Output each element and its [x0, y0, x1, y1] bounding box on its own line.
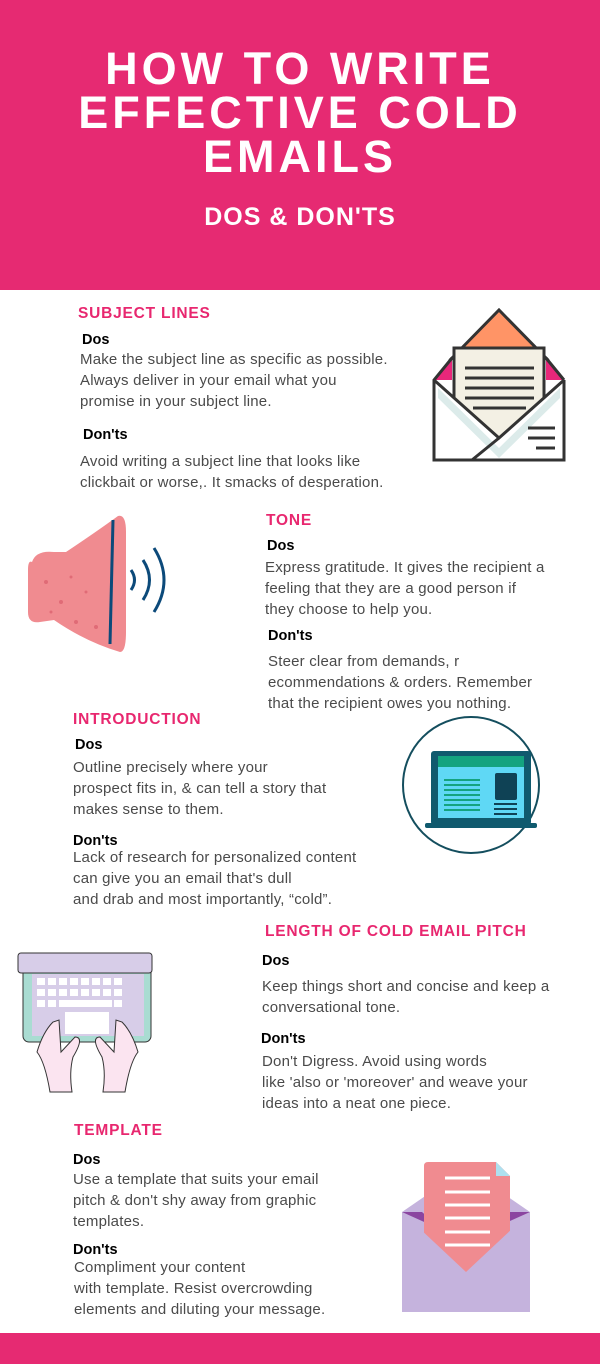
section: length of cold email pitch: like 'also or 'moreover' and weave your: [262, 1074, 528, 1091]
title: EMAILS: [203, 131, 397, 182]
section: length of cold email pitch: Don'ts: [261, 1031, 306, 1047]
section: tone: Express gratitude. It gives the recipient a: [265, 559, 545, 576]
section: template: Use a template that suits your email: [73, 1171, 319, 1188]
section: length of cold email pitch: LENGTH OF COLD EMAIL PITCH: [265, 923, 527, 940]
section: introduction: makes sense to them.: [73, 801, 224, 818]
section: introduction: [73, 711, 356, 908]
section: introduction: Lack of research for personalized content: [73, 849, 356, 866]
title: EFFECTIVE COLD: [78, 87, 522, 138]
section: introduction: can give you an email that's dull: [73, 870, 292, 887]
section: introduction: prospect fits in, & can tell a story that: [73, 780, 326, 797]
icon: open envelope: [432, 308, 566, 462]
section: subject lines: promise in your subject line.: [80, 393, 272, 410]
subtitle: DOS & DON'TS: [204, 203, 396, 231]
section: tone: Dos: [267, 538, 294, 554]
section: tone: TONE: [266, 512, 312, 529]
section: length of cold email pitch: ideas into a neat one piece.: [262, 1095, 451, 1112]
section: subject lines: [78, 305, 388, 491]
section: template: Dos: [73, 1152, 100, 1168]
footer bar: [0, 1333, 600, 1364]
section: tone: [265, 512, 545, 712]
section: tone: Don'ts: [268, 628, 313, 644]
section: introduction: and drab and most importantly, “cold”.: [73, 891, 332, 908]
icon: speaker: [28, 516, 166, 652]
section: template: Compliment your content: [74, 1259, 245, 1276]
section: template: Don'ts: [73, 1242, 118, 1258]
section: length of cold email pitch: Keep things short and concise and keep a: [262, 978, 549, 995]
section: length of cold email pitch: Don't Digress. Avoid using words: [262, 1053, 487, 1070]
title: [78, 43, 522, 182]
section: template: [73, 1122, 325, 1318]
icon: envelope with letter: [402, 1162, 530, 1312]
section: subject lines: Don'ts: [83, 427, 128, 443]
section: length of cold email pitch: conversational tone.: [262, 999, 400, 1016]
section: template: with template. Resist overcrowding: [74, 1280, 313, 1297]
section: subject lines: clickbait or worse,. It smacks of desperation.: [80, 474, 383, 491]
section: introduction: Dos: [75, 737, 102, 753]
section: tone: they choose to help you.: [265, 601, 432, 618]
section: length of cold email pitch: [261, 923, 550, 1112]
header banner: [0, 0, 600, 290]
section: subject lines: Make the subject line as specific as possible.: [80, 351, 388, 368]
section: template: pitch & don't shy away from graphic: [73, 1192, 316, 1209]
section: template: elements and diluting your message.: [74, 1301, 325, 1318]
section: tone: Steer clear from demands, r: [268, 653, 459, 670]
section: introduction: Outline precisely where your: [73, 759, 268, 776]
section: subject lines: Dos: [82, 332, 109, 348]
section: tone: ecommendations & orders. Remember: [268, 674, 532, 691]
section: template: TEMPLATE: [74, 1122, 163, 1139]
section: tone: feeling that they are a good person if: [265, 580, 516, 597]
section: introduction: Don'ts: [73, 833, 118, 849]
title: HOW TO WRITE: [105, 43, 495, 94]
section: subject lines: Avoid writing a subject line that looks like: [80, 453, 360, 470]
section: introduction: INTRODUCTION: [73, 711, 201, 728]
section: template: templates.: [73, 1213, 144, 1230]
section: length of cold email pitch: Dos: [262, 953, 289, 969]
icon: laptop in circle: [402, 716, 540, 854]
section: tone: that the recipient owes you nothing.: [268, 695, 511, 712]
icon: keyboard with hands: [18, 952, 152, 1092]
section: subject lines: SUBJECT LINES: [78, 305, 211, 322]
section: subject lines: Always deliver in your email what you: [80, 372, 337, 389]
